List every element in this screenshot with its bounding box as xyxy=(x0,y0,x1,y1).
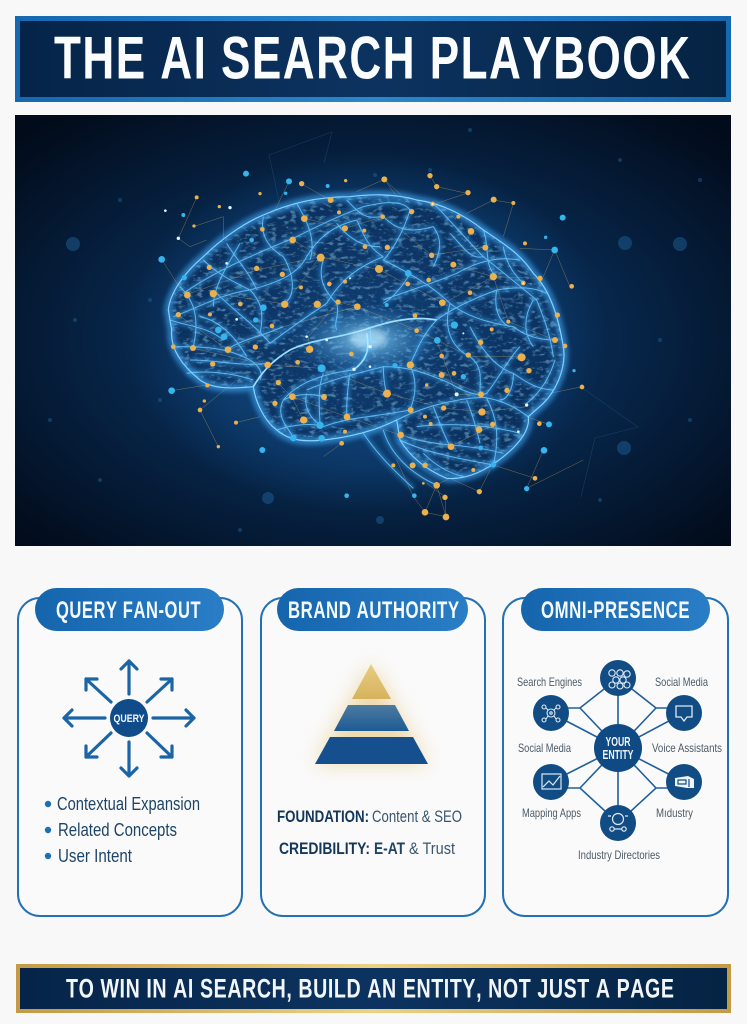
icon: industry directories node xyxy=(600,805,636,841)
node labels: Social Media xyxy=(518,741,571,755)
centre: your entity: ENTITY xyxy=(602,748,634,762)
icon: map image node xyxy=(533,764,569,800)
icon: query arrows radiating out xyxy=(64,661,194,776)
title banner xyxy=(15,16,731,102)
text: pyramid captions: E-AT xyxy=(374,839,405,858)
panel: omni-presence xyxy=(503,588,728,916)
bullet list: User Intent xyxy=(58,846,132,866)
node labels: Industry Directories xyxy=(578,848,660,862)
panel: query fan-out xyxy=(18,588,242,916)
hub-and-spoke diagram xyxy=(517,660,722,862)
heading: query fan-out: QUERY FAN-OUT xyxy=(56,597,201,624)
text: pyramid captions: CREDIBILITY: xyxy=(279,839,370,858)
icon: voice and devices node xyxy=(666,764,702,800)
icon: social media screen node xyxy=(666,695,702,731)
text: pyramid captions xyxy=(277,807,462,858)
halo xyxy=(148,168,585,498)
node labels: Social Media xyxy=(655,675,708,689)
brain in zoom coordinates xyxy=(148,168,585,520)
node labels: Mıdustry xyxy=(656,806,693,820)
icon: three-tier pyramid xyxy=(315,664,428,764)
footer banner xyxy=(16,964,731,1013)
heading: brand authority xyxy=(277,588,468,631)
fibrous texture inside the brain xyxy=(163,190,570,483)
blue nodes xyxy=(158,171,576,498)
node labels: Search Engines xyxy=(517,675,582,689)
gold nodes xyxy=(171,173,584,520)
brain contour xyxy=(168,195,564,479)
heading: omni-presence: OMNI-PRESENCE xyxy=(541,597,690,624)
bullet list xyxy=(45,794,200,866)
icon: search engines node xyxy=(533,695,569,731)
gyri glow xyxy=(170,200,555,488)
background bokeh dots xyxy=(48,128,702,532)
heading: brand authority: BRAND AUTHORITY xyxy=(288,597,460,624)
heading: query fan-out xyxy=(35,588,224,631)
panel: brand authority xyxy=(261,588,485,916)
icon: query arrows radiating out: QUERY xyxy=(114,713,145,725)
centre: your entity xyxy=(594,724,642,772)
gyri lines xyxy=(170,200,555,488)
core glow xyxy=(296,306,437,374)
centre: your entity: YOUR xyxy=(606,735,630,749)
text: pyramid captions: FOUNDATION: xyxy=(277,807,369,826)
text: pyramid captions: & Trust xyxy=(409,839,455,858)
title banner: THE AI SEARCH PLAYBOOK xyxy=(54,25,691,92)
heading: omni-presence xyxy=(521,588,710,631)
icon: top node xyxy=(600,660,636,696)
white sparkles xyxy=(164,203,528,433)
bullet list: Contextual Expansion xyxy=(57,794,200,814)
node labels: Mapping Apps xyxy=(522,806,581,820)
bright centre xyxy=(350,328,387,348)
node labels: Voice Assistants xyxy=(652,741,722,755)
text: pyramid captions: Content & SEO xyxy=(372,807,462,826)
lateral fissure highlight xyxy=(253,318,437,387)
footer banner: TO WIN IN AI SEARCH, BUILD AN ENTITY, NOT JUST A PAGE xyxy=(66,975,675,1004)
outer contour glow xyxy=(168,195,564,479)
bullet list: Related Concepts xyxy=(58,820,177,840)
node labels xyxy=(517,675,722,862)
network lines xyxy=(162,176,583,517)
faint outer network xyxy=(269,132,638,497)
hero image: glowing neural brain xyxy=(15,115,731,546)
